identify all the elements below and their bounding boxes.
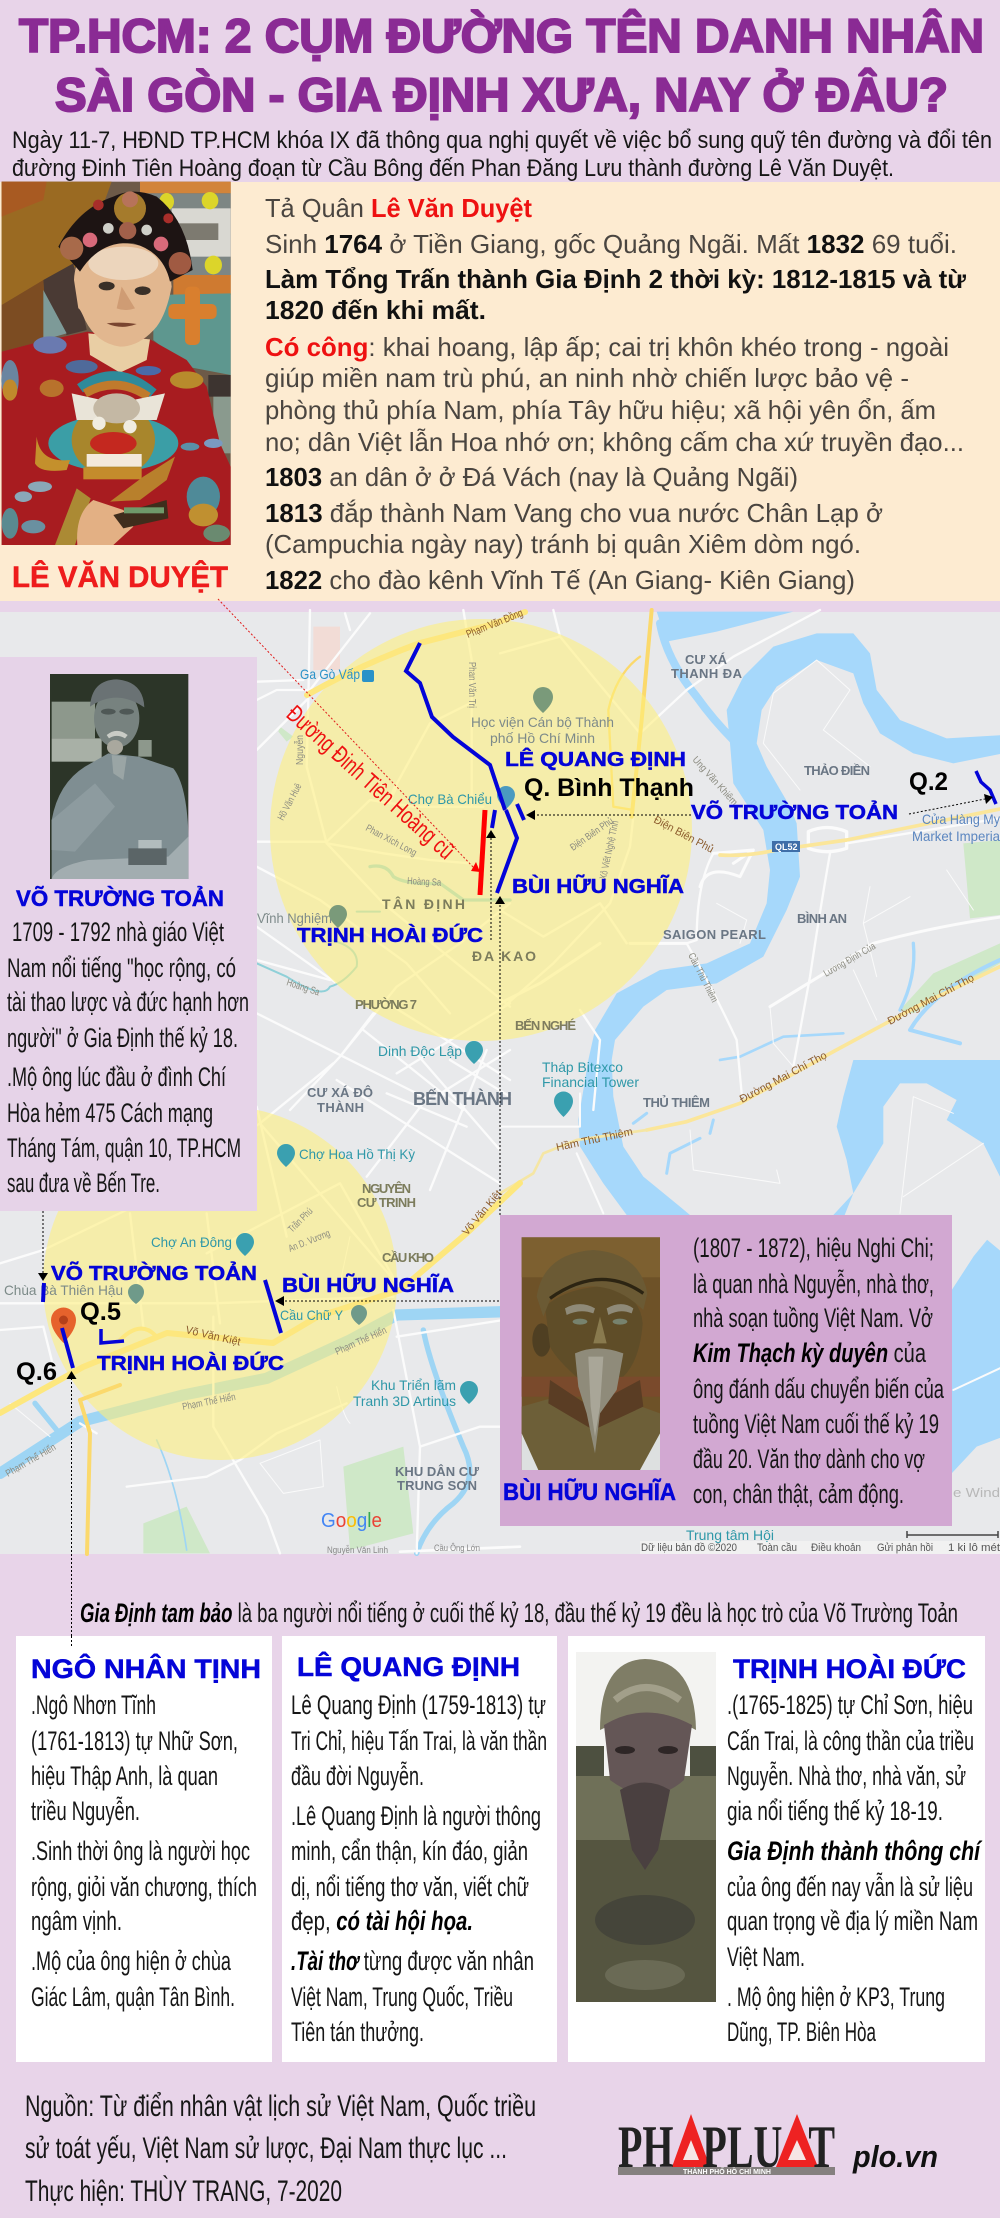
photo: statue of Võ Trường Toản [50, 674, 188, 879]
map place labels: Nguyễn [293, 735, 306, 765]
text: .Lê Quang Định là người thông [291, 1801, 541, 1831]
map [0, 607, 1000, 1555]
map place labels: SAIGON PEARL [663, 927, 767, 942]
map place labels: Financial Tower [542, 1074, 639, 1090]
text: Giác Lâm, quận Tân Bình. [31, 1982, 235, 2012]
street line: Võ Trường Toản Q.2 [976, 771, 996, 804]
biography text: Tả Quân Lê Văn Duyệt [265, 193, 532, 223]
map highways [0, 612, 525, 1554]
biography text: phòng thủ phía Nam, phía Tây hữu hiệu; xã hội yên ổn, ấm [265, 395, 936, 425]
label: Quận 2: Q.2 [909, 768, 948, 796]
dashed arrow: Bùi Hữu Nghĩa south [275, 1296, 499, 1306]
label: Võ Trường Toản: VÕ TRƯỜNG TOẢN [691, 800, 898, 824]
map: water and parks, east side [500, 610, 1000, 1473]
map place labels: Phạm Thế Hiển [333, 1324, 388, 1358]
map place labels: KHU DÂN CƯ [395, 1464, 480, 1479]
dashed arrow: Võ Trường Toản Q.5 [38, 1211, 48, 1281]
Google logo: Google [321, 1510, 382, 1532]
street line: Bùi Hữu Nghĩa [497, 810, 517, 893]
biography text: người" ở Gia Định thế kỷ 18. [7, 1023, 238, 1053]
map attribution: e Wind [953, 1485, 1000, 1500]
map pin icons [128, 670, 573, 1404]
text: .Tài thơ từng được văn nhân [291, 1946, 534, 1976]
map place labels: Phạm Văn Đồng [465, 607, 525, 641]
biography text: 1820 đến khi mất. [265, 295, 486, 325]
text: triều Nguyễn. [31, 1795, 140, 1826]
biography text: .Mộ ông lúc đầu ở đình Chí [7, 1062, 226, 1092]
map place labels: THẢO ĐIỀN [804, 763, 871, 778]
street line: Bùi Hữu Nghĩa south [265, 1280, 281, 1333]
street line: Trịnh Hoài Đức south [101, 1329, 124, 1343]
dashed arrow: to Võ Trường Toản, Bình Thạnh [526, 810, 691, 820]
logo: Pháp Luật: THÀNH PHỐ HỒ CHÍ MINH [683, 2166, 771, 2176]
dashed arrow: from Bùi Hữu Nghĩa panel [495, 896, 505, 1215]
map place labels: Phạm Thế Hiển [181, 1391, 237, 1413]
text [31, 1690, 257, 2012]
map place labels: CƯ XÁ ĐÔ [307, 1085, 374, 1100]
biography text: 1803 an dân ở ở Đá Vách (nay là Quảng Ngãi) [265, 462, 798, 492]
label: Trịnh Hoài Đức south: TRỊNH HOÀI ĐỨC [97, 1351, 284, 1375]
panel: Bùi Hữu Nghĩa [500, 1215, 952, 1526]
map place labels: Lương Định Của [822, 940, 878, 980]
map place labels: Ung Văn Khiêm [690, 755, 739, 808]
map attribution: 1 ki lô mét [948, 1542, 1000, 1554]
map annotations: streets, arrows, labels [16, 599, 996, 1648]
biography text [265, 193, 966, 595]
map place labels: Chùa Bà Thiên Hậu [4, 1282, 123, 1298]
map place labels: TÂN ĐỊNH [382, 895, 466, 912]
street line: Võ Trường Toản Q.5 [43, 1283, 44, 1302]
map place labels: THANH ĐA [671, 666, 743, 681]
map place labels: Chợ An Đông [151, 1234, 232, 1250]
map place labels: TRUNG SƠN [397, 1478, 478, 1493]
title: SÀI GÒN - GIA ĐỊNH XƯA, NAY Ở ĐÂU? [55, 68, 948, 121]
heading: TRỊNH HOÀI ĐỨC [733, 1653, 966, 1684]
map place labels: BẾN NGHÉ [515, 1018, 577, 1033]
biography text: 1709 - 1792 nhà giáo Việt [12, 917, 224, 947]
map place labels: Đường Mai Chí Thọ [738, 1050, 829, 1106]
map: roads and creeks, north-west [257, 610, 510, 1110]
map: water, roads, south-west [0, 1050, 520, 1553]
map place labels: Ga Gò Vấp [300, 666, 360, 682]
street line: Lê Quang Định [406, 643, 505, 810]
map place labels: Phan Xích Long [364, 823, 418, 859]
sources and credit: Thực hiện: THÙY TRANG, 7-2020 [25, 2175, 342, 2208]
map place labels: THỦ THIÊM [643, 1095, 711, 1110]
map place labels: Phạm Thế Hiển [4, 1441, 58, 1480]
biography text: sau đưa về Bến Tre. [7, 1168, 160, 1198]
map attribution [327, 1485, 1000, 1555]
text: dị, nổi tiếng thơ văn, viết chữ [291, 1872, 529, 1902]
map place labels [4, 607, 1000, 1493]
map place labels: phố Hồ Chí Minh [490, 730, 595, 746]
map place labels: Hầm Thủ Thiêm [555, 1126, 634, 1154]
map place labels: CẦU KHO [382, 1250, 435, 1265]
intro text: đường Đinh Tiên Hoàng đoạn từ Cầu Bông đến Phan Đăng Lưu thành đường Lê Văn Duyệt. [12, 155, 894, 182]
sources and credit: sử toát yếu, Việt Nam sử lược, Đại Nam thực lục ... [25, 2132, 507, 2165]
caption: BÙI HỮU NGHĨA [503, 1478, 676, 1506]
map place labels: Trần Phú [286, 1205, 315, 1235]
label: Quận Bình Thạnh: Q. Bình Thạnh [524, 774, 694, 802]
street line: Đinh Tiên Hoàng old [480, 810, 485, 895]
street line: Q.6 [62, 1328, 73, 1368]
website name: plo.vn [852, 2139, 938, 2174]
map place labels: THÀNH [317, 1100, 365, 1115]
label: Bùi Hữu Nghĩa south: BÙI HỮU NGHĨA [282, 1273, 454, 1297]
text: .Mộ của ông hiện ở chùa [31, 1946, 232, 1976]
map place labels: Võ Văn Kiệt [460, 1188, 505, 1238]
text: Dũng, TP. Biên Hòa [727, 2017, 877, 2047]
sources and credit [25, 2090, 536, 2208]
biography text: 1813 đắp thành Nam Vang cho vua nước Chân Lạp ở [265, 498, 883, 528]
map place labels: Hoàng Sa [285, 977, 321, 998]
photo: bust of Trịnh Hoài Đức [576, 1652, 716, 2002]
label: Võ Trường Toản Q.5: VÕ TRƯỜNG TOẢN [51, 1261, 257, 1285]
text: .Ngô Nhơn Tĩnh [31, 1690, 156, 1720]
map attribution: Cầu Ông Lớn [434, 1543, 480, 1553]
text: Việt Nam. [727, 1942, 805, 1972]
panel: Lê Văn Duyệt [0, 182, 1000, 601]
text: hiệu Thập Anh, là quan [31, 1761, 218, 1791]
map place labels: Chợ Bà Chiểu [408, 791, 492, 807]
biography text: Hòa hẻm 475 Cách mạng [7, 1098, 213, 1128]
biography text: tài thao lược và đức hạnh hơn [7, 987, 249, 1017]
title [19, 9, 984, 121]
biography text: Nam nổi tiếng "học rộng, có [7, 953, 236, 983]
label: Quận 5: Q.5 [80, 1298, 121, 1326]
biography text: con, chân thật, cảm động. [693, 1479, 904, 1509]
biography text: (Campuchia ngày nay) tránh bị quân Xiêm dòm ngó. [265, 529, 861, 559]
map place labels: Hồ Văn Huê [275, 781, 305, 822]
old street label: Đường Đinh Tiên Hoàng cũ [281, 700, 460, 865]
map place labels: Tranh 3D Artinus [353, 1393, 456, 1409]
street line: Võ Trường Toản [517, 804, 524, 820]
portrait: Lê Văn Duyệt [1, 182, 231, 545]
text [291, 1690, 547, 2047]
text: .Sinh thời ông là người học [31, 1836, 250, 1866]
street line: Trịnh Hoài Đức [492, 810, 495, 828]
map attribution: Trung tâm Hội [686, 1527, 774, 1543]
map place labels: Xô Viết Nghệ Tĩnh [597, 819, 621, 881]
map place labels: BẾN THÀNH [413, 1088, 513, 1109]
dashed arrow: Trịnh Hoài Đức [486, 830, 496, 940]
map place labels: Cầu Chữ Y [280, 1307, 344, 1323]
map place labels: An D. Vương [287, 1228, 332, 1255]
map place labels: PHƯỜNG 7 [355, 997, 418, 1012]
map place labels: Hoàng Sa [407, 876, 442, 889]
portrait name: LÊ VĂN DUYỆT [12, 560, 228, 594]
map attribution: Điều khoản [811, 1542, 861, 1554]
map place labels: Dinh Độc Lập [378, 1043, 462, 1059]
map place labels: Cầu Thủ Thiêm [685, 951, 721, 1004]
biography text: Tháng Tám, quận 10, TP.HCM [7, 1133, 241, 1163]
map place labels: Khu Triển lãm [371, 1377, 456, 1393]
text [727, 1690, 983, 2047]
map attribution: Toàn cầu [757, 1542, 797, 1554]
map place labels: Chợ Hoa Hồ Thị Kỳ [299, 1146, 415, 1162]
title: TP.HCM: 2 CỤM ĐƯỜNG TÊN DANH NHÂN [19, 9, 984, 62]
map place labels: Vĩnh Nghiệm [257, 910, 332, 926]
panel: Lê Quang Định [282, 1636, 557, 2062]
logo: Pháp Luật: PHAPLUAT [618, 2114, 835, 2180]
label: Quận 6: Q.6 [16, 1358, 57, 1386]
map place labels: QL52 [775, 842, 798, 852]
text: rộng, giỏi văn chương, thích [31, 1872, 257, 1902]
map attribution: Dữ liệu bản đồ ©2020 [641, 1542, 737, 1554]
heading: NGÔ NHÂN TỊNH [31, 1653, 261, 1684]
map place labels: Điện Biên Phủ [568, 815, 616, 853]
biography text [693, 1233, 945, 1509]
map place labels: Phan Văn Trị [466, 662, 477, 708]
label: Lê Quang Định: LÊ QUANG ĐỊNH [505, 747, 686, 771]
map place labels: CƯ TRINH [357, 1195, 417, 1210]
map place labels: BÌNH AN [797, 911, 848, 926]
biography text: no; dân Việt lẫn Hoa nhớ ơn; không cấm cha xứ truyền đạo... [265, 427, 964, 457]
biography text: Có công: khai hoang, lập ấp; cai trị khôn khéo trong - ngoài [265, 332, 949, 362]
red arrow to old street [218, 599, 480, 872]
map place labels: ĐA KAO [472, 948, 537, 964]
map pin: grave location [51, 1308, 76, 1343]
intro text [12, 127, 992, 182]
map place labels: Đường Mai Chí Thọ [886, 972, 976, 1028]
highlighted yellow district circles [43, 619, 692, 1460]
biography text: 1822 cho đào kênh Vĩnh Tế (An Giang- Kiên Giang) [265, 565, 855, 595]
label: Bùi Hữu Nghĩa: BÙI HỮU NGHĨA [512, 874, 684, 898]
label: Trịnh Hoài Đức: TRỊNH HOÀI ĐỨC [297, 923, 483, 947]
text: ngâm vịnh. [31, 1906, 122, 1936]
map place labels: Điện Biên Phủ [652, 814, 715, 856]
biography text: giúp miền nam trù phú, an ninh nhờ chiến lược bảo vệ - [265, 363, 909, 393]
text: Lê Quang Định (1759-1813) tự [291, 1690, 546, 1720]
dashed arrow: Q.2 [909, 794, 993, 814]
map attribution: Nguyễn Văn Linh [327, 1545, 388, 1555]
heading: LÊ QUANG ĐỊNH [297, 1651, 520, 1682]
text: (1761-1813) tự Nhữ Sơn, [31, 1726, 238, 1756]
map place labels: NGUYÊN [362, 1181, 412, 1196]
biography text [7, 917, 249, 1198]
text: đẹp, có tài hội họa. [291, 1906, 473, 1936]
heading: VÕ TRƯỜNG TOẢN [16, 886, 224, 911]
dashed connector [70, 1636, 72, 1648]
map attribution: Gửi phản hồi [877, 1542, 933, 1554]
biography text: Làm Tổng Trấn thành Gia Định 2 thời kỳ: 1812-1815 và từ [265, 264, 966, 294]
biography text: Sinh 1764 ở Tiền Giang, gốc Quảng Ngãi. Mất 1832 69 tuổi. [265, 229, 957, 259]
text: minh, cẩn thận, kín đáo, giản [291, 1836, 528, 1866]
panel: Ngô Nhân Tịnh [16, 1636, 272, 2062]
sources and credit: Nguồn: Từ điển nhân vật lịch sử Việt Nam, Quốc triều [25, 2090, 536, 2123]
text: Tiên tán thưởng. [291, 2017, 424, 2047]
text: Tri Chỉ, hiệu Tấn Trai, là văn thần [291, 1726, 547, 1756]
text: Việt Nam, Trung Quốc, Triều [291, 1982, 513, 2012]
text: đầu đời Nguyễn. [291, 1760, 424, 1791]
map place labels: Võ Văn Kiệt [184, 1324, 242, 1349]
panel: Trịnh Hoài Đức [568, 1636, 985, 2062]
map place labels: Học viện Cán bộ Thành [471, 714, 614, 730]
map place labels: Tháp Bitexco [542, 1059, 623, 1075]
panel: Võ Trường Toản [0, 657, 257, 1211]
photo: bust of Bùi Hữu Nghĩa [522, 1237, 660, 1470]
biography text: Kim Thạch kỳ duyên của [693, 1338, 927, 1368]
map place labels: CƯ XÁ [685, 652, 728, 667]
dashed arrow: from Ngô Nhân Tịnh card [66, 1371, 76, 1648]
